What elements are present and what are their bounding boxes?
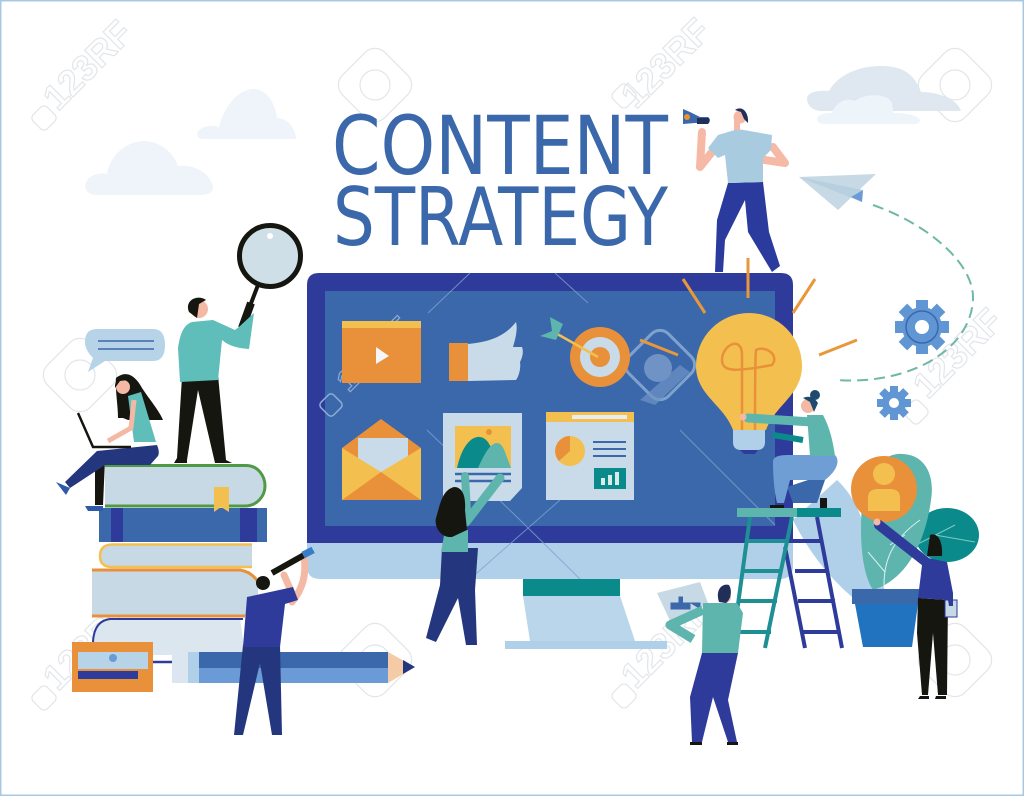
book: blue [99,508,267,542]
title: CONTENT [332,100,668,194]
stack of books [92,465,267,655]
icon: browser dashboard [546,412,634,500]
light rays [640,258,857,355]
plant [793,454,979,647]
pot [852,589,922,647]
icon: light bulb [696,313,802,454]
person: woman with laptop [56,374,163,511]
magnifying glass [240,226,300,328]
icon: small gear [877,386,911,420]
title [332,100,669,264]
person: man with telescope [234,550,313,735]
laptop [78,413,131,447]
person: woman reaching document [426,476,500,645]
person: woman holding badge [874,518,957,699]
watermarks: 123RF [35,12,140,118]
screen watermark: 123RF [331,311,418,398]
clouds [85,66,961,195]
chart paper [657,582,708,627]
icon: large gear [895,300,949,354]
book: yellow [100,544,252,567]
dashed flight path [837,205,973,380]
icon: envelope [342,419,421,500]
person: woman on ladder [740,390,838,508]
person: man with megaphone [683,108,785,272]
watermarks: 123RF [613,10,718,116]
watermarks: 123RF [613,590,718,696]
screen watermark [318,273,775,579]
icon: sharpener [72,642,153,692]
book: orange [92,570,258,616]
icon: user badge [851,456,917,522]
speech bubble [85,329,165,372]
teal leaf [861,454,932,590]
telescope [272,550,313,573]
icon: image document [443,413,522,501]
person: man with magnifier [174,226,300,463]
book: navy bottom [93,618,245,655]
panel: monitor [307,273,793,649]
title: STRATEGY [333,171,669,264]
large light leaf [793,480,887,597]
watermarks: 123RF [35,592,140,698]
icon: target with arrow [540,317,630,387]
megaphone [683,109,710,124]
watermarks: 123RF [905,300,1010,406]
monitor stand [505,579,667,649]
book: green [105,465,265,512]
icon: video player [342,321,421,383]
person: man with chart [657,582,743,745]
ladder [732,508,842,648]
paper plane [799,174,876,210]
icon: thumbs up [449,322,523,381]
dark teal leaf [915,508,979,562]
pencil [153,652,415,683]
